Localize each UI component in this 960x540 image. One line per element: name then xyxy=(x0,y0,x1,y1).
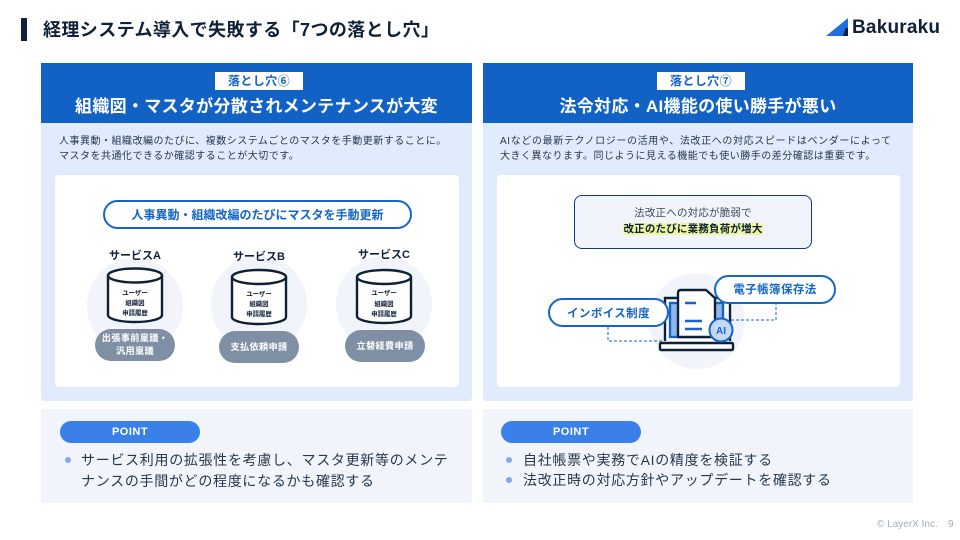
callout: manual master update: 人事異動・組織改編のたびにマスタを手動更新 xyxy=(131,208,384,222)
point text 2: 法改正時の対応方針やアップデートを確認する xyxy=(523,472,832,488)
footer: copyright and page number: © LayerX Inc. xyxy=(877,519,938,530)
panel: point 7 xyxy=(483,409,913,503)
callout: weak compliance xyxy=(574,195,812,249)
label: invoice system: インボイス制度 xyxy=(567,308,650,320)
description: pitfall 7: AIなどの最新テクノロジーの活用や、法改正への対応スピードはベンダーによって xyxy=(500,136,892,147)
database A: 組織図 xyxy=(125,298,145,307)
callout: weak compliance: 法改正への対応が脆弱で xyxy=(634,207,752,219)
label: invoice system xyxy=(548,298,669,327)
description: pitfall 6 xyxy=(59,135,447,162)
description: pitfall 7 xyxy=(500,135,892,162)
tag: payment request: 支払依頼申請 xyxy=(231,342,287,352)
service C xyxy=(336,248,432,362)
heading: pitfall 6: 組織図・マスタが分散されメンテナンスが大変 xyxy=(75,97,438,116)
tag: pitfall 7 xyxy=(657,72,745,90)
panel header: pitfall 6 xyxy=(41,63,472,123)
description: pitfall 7: 大きく異なります。同じように見える機能でも使い勝手の差分確認は重要です。 xyxy=(500,151,876,162)
callout: weak compliance: 改正のたびに業務負荷が増大 xyxy=(623,222,763,234)
point text xyxy=(81,452,448,489)
tag: pre-approval xyxy=(95,329,175,361)
point text 1: 自社帳票や実務でAIの精度を検証する xyxy=(523,452,773,468)
database C: 組織図 xyxy=(374,299,394,308)
database A: 申請履歴 xyxy=(122,308,148,317)
label: service B: サービスB xyxy=(233,251,285,263)
logo: Bakuraku: Bakuraku xyxy=(852,17,940,38)
label: electronic books law xyxy=(714,275,836,304)
database B: 組織図 xyxy=(249,299,269,308)
bullet marker xyxy=(506,477,512,483)
label: service C: サービスC xyxy=(358,249,410,261)
bullet marker xyxy=(65,457,71,463)
badge: point xyxy=(60,421,200,443)
title bar marker xyxy=(21,18,27,41)
badge: point xyxy=(501,421,641,443)
database C: 申請履歴 xyxy=(371,309,397,318)
service A xyxy=(87,250,183,361)
panel: pitfall 7 xyxy=(483,63,913,401)
footer: copyright and page number: 9 xyxy=(948,519,954,530)
service B xyxy=(211,250,307,363)
database B: ユーザー xyxy=(246,289,272,298)
database A: ユーザー xyxy=(122,288,148,297)
description: pitfall 6: マスタを共通化できるか確認することが大切です。 xyxy=(59,151,299,162)
point text: ナンスの手間がどの程度になるかも確認する xyxy=(81,473,375,489)
database B xyxy=(211,256,307,336)
tag: pre-approval: 汎用稟議 xyxy=(116,346,154,356)
tag: pre-approval: 出張事前稟議・ xyxy=(102,333,168,343)
diagram card: legal compliance xyxy=(497,175,900,387)
label: service A: サービスA xyxy=(109,250,161,262)
panel header: pitfall 7 xyxy=(483,63,913,123)
panel: point 6 xyxy=(41,409,472,503)
badge: point: POINT xyxy=(553,426,589,438)
database C: ユーザー xyxy=(371,288,397,297)
title: 経理システム導入で失敗する「7つの落とし穴」 xyxy=(43,20,439,40)
callout: manual master update xyxy=(103,200,412,229)
tag: pitfall 7: 落とし穴⑦ xyxy=(670,74,732,88)
database A xyxy=(87,258,183,336)
description: pitfall 6: 人事異動・組織改編のたびに、複数システムごとのマスタを手動更新することに。 xyxy=(59,136,447,147)
database B: 申請履歴 xyxy=(246,309,272,318)
badge: point: POINT xyxy=(112,426,148,438)
label: electronic books law: 電子帳簿保存法 xyxy=(733,284,817,296)
icon: laptop with document and AI badge xyxy=(608,273,776,369)
bullet marker xyxy=(506,457,512,463)
heading: pitfall 7: 法令対応・AI機能の使い勝手が悪い xyxy=(559,97,837,116)
database C xyxy=(336,256,432,336)
tag: expense request xyxy=(345,330,425,362)
tag: payment request xyxy=(219,331,299,363)
diagram card: services xyxy=(55,175,459,387)
tag: pitfall 6: 落とし穴⑥ xyxy=(228,74,290,88)
tag: pitfall 6 xyxy=(215,72,303,90)
panel: pitfall 6 xyxy=(41,63,472,401)
point text: サービス利用の拡張性を考慮し、マスタ更新等のメンテ xyxy=(81,452,448,468)
icon: laptop with document and AI badge: AI xyxy=(716,326,726,337)
tag: expense request: 立替経費申請 xyxy=(357,340,413,350)
